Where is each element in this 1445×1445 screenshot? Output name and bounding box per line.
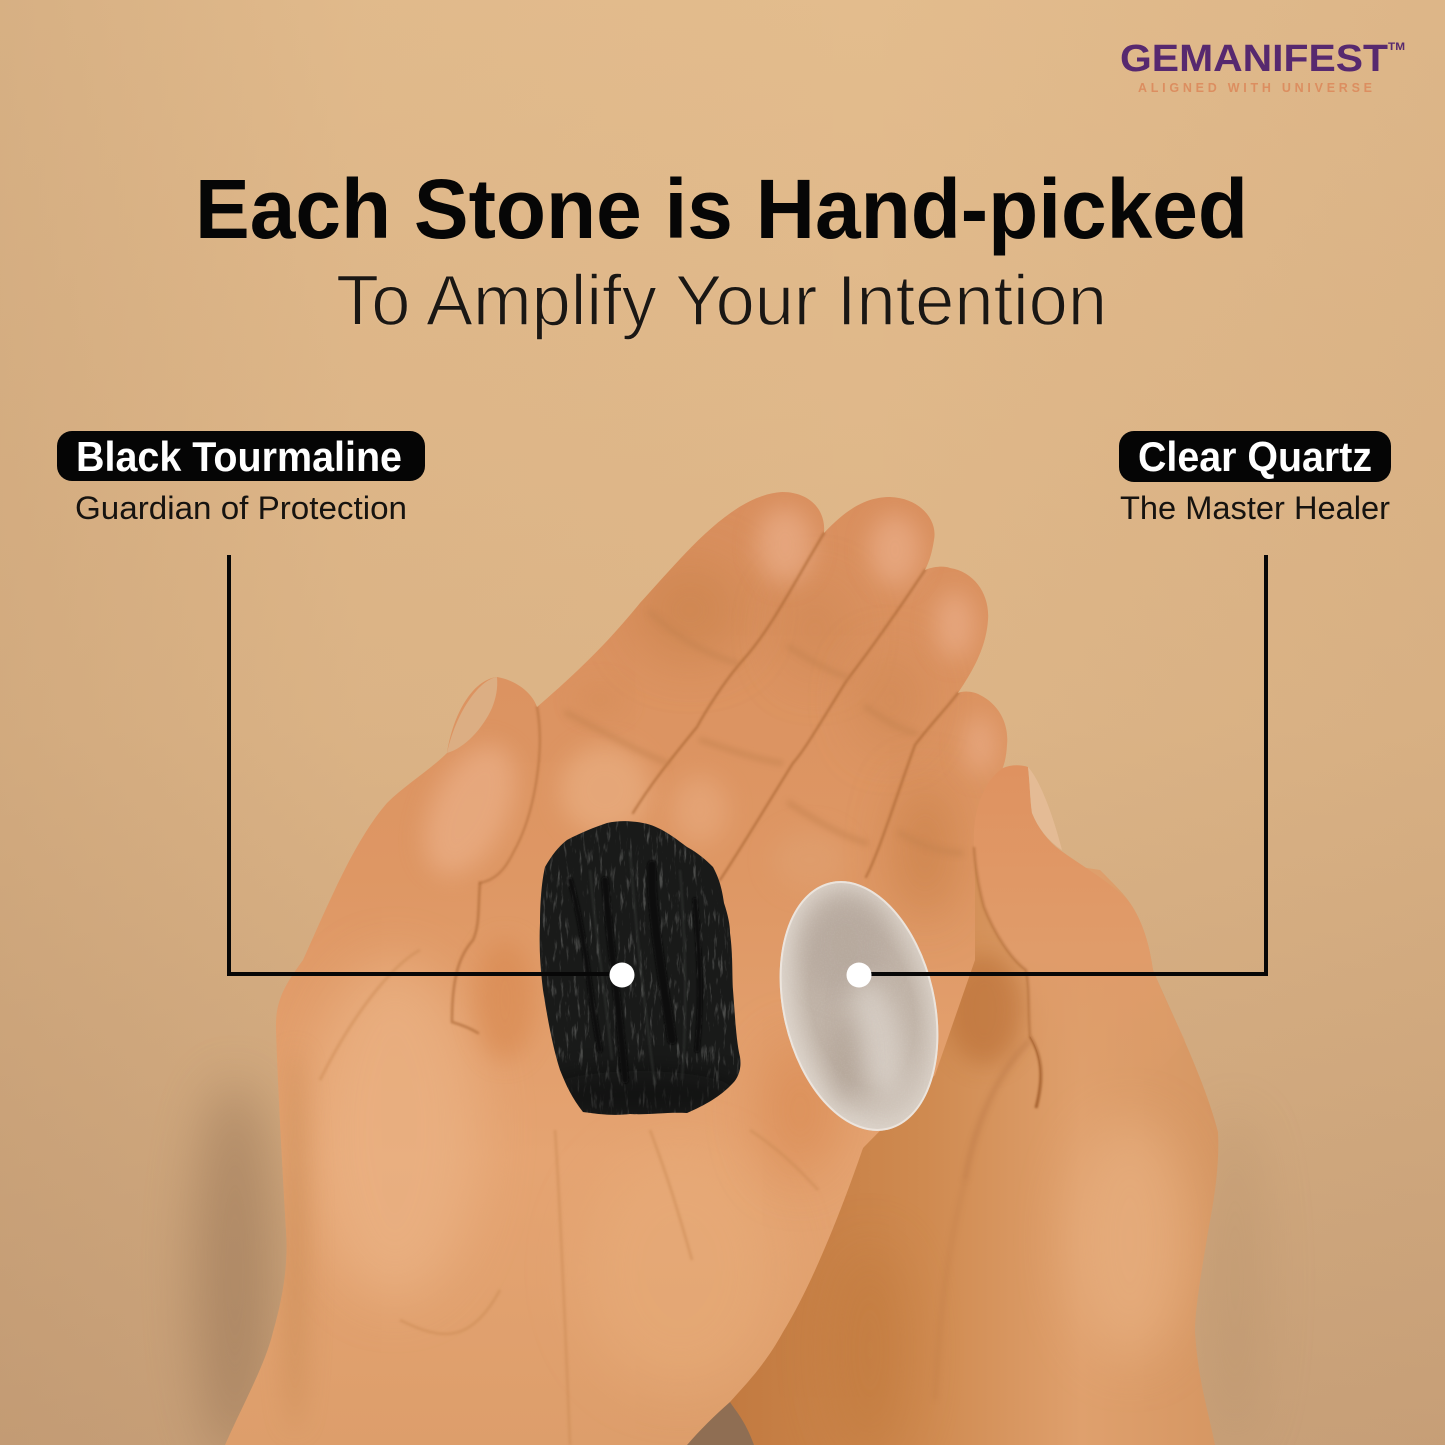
logo: GEMANIFEST (1120, 38, 1388, 80)
label: Black Tourmaline: Guardian of Protection (75, 490, 407, 526)
label: Black Tourmaline (57, 431, 425, 526)
label: Clear Quartz: Clear Quartz (1138, 433, 1372, 480)
palm lines (320, 950, 818, 1445)
title: Each Stone is Hand-picked (195, 162, 1248, 256)
stone: black tourmaline (540, 821, 740, 1115)
label: Clear Quartz: The Master Healer (1120, 490, 1390, 526)
label: Clear Quartz (1119, 431, 1391, 526)
connector: Black Tourmaline (229, 555, 634, 988)
left hand with fingers (front) (225, 492, 1007, 1445)
label: Black Tourmaline: Black Tourmaline (76, 433, 402, 480)
finger shading (560, 507, 996, 920)
logo: ALIGNED WITH UNIVERSE (1138, 81, 1372, 95)
logo: TM (1388, 41, 1405, 53)
illustration: two cupped hands holding stones (225, 492, 1218, 1445)
stone: clear quartz (780, 881, 938, 1131)
title (195, 162, 1248, 341)
logo (1120, 38, 1405, 95)
finger creases (567, 660, 866, 844)
left thumb nail (447, 677, 497, 753)
right hand (back) (730, 850, 1218, 1445)
palm highlights (281, 730, 840, 1430)
finger separation lines (452, 533, 958, 1033)
title: To Amplify Your Intention (336, 262, 1107, 341)
right thumb (974, 765, 1185, 1108)
connector: Clear Quartz (846, 555, 1266, 988)
